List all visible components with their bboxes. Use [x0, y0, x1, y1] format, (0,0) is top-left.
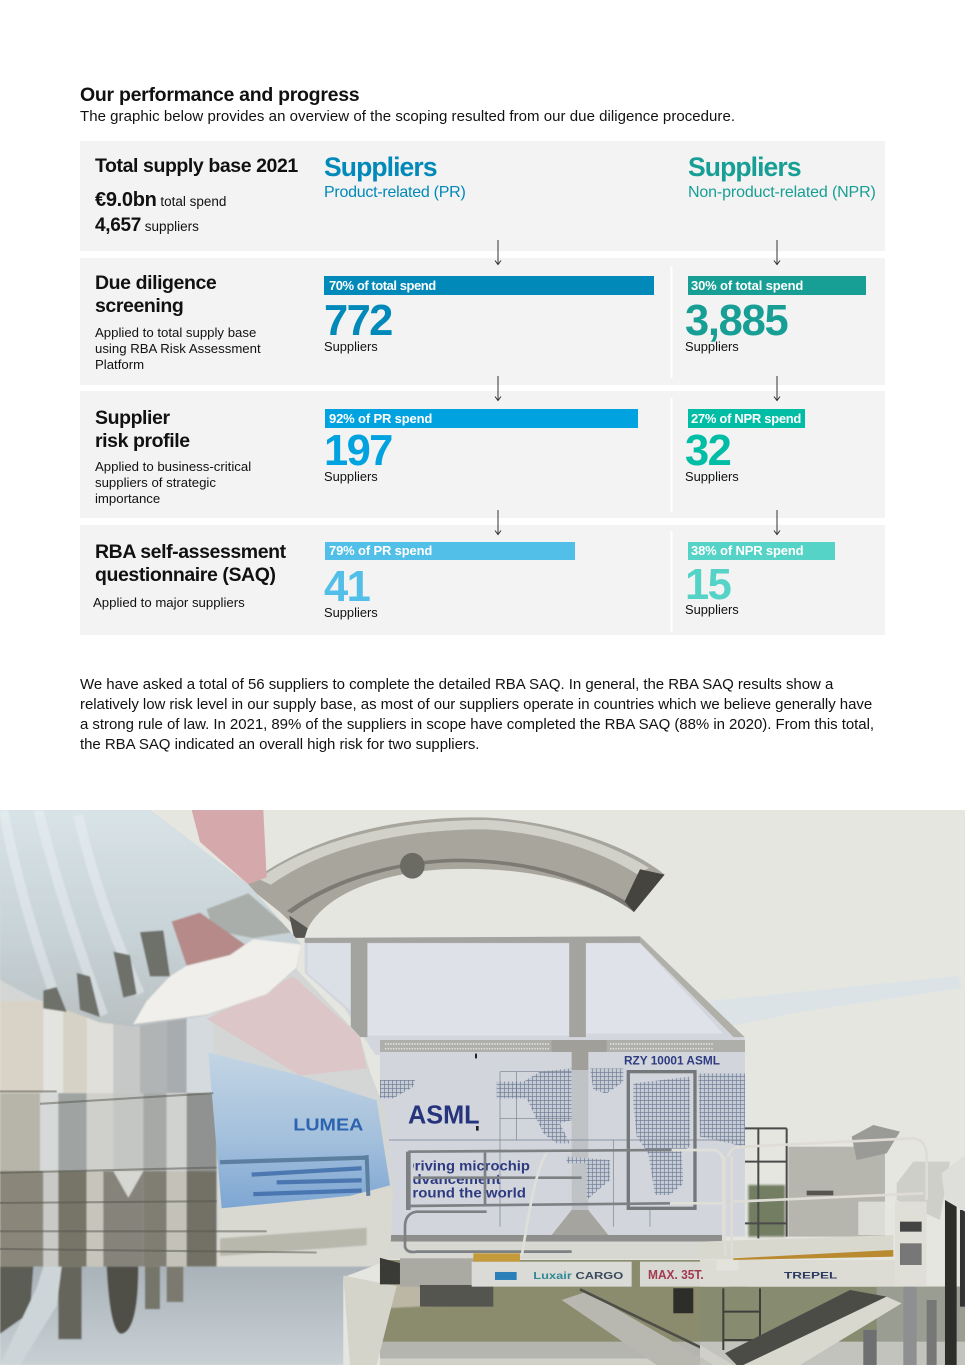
NPR suppliers label: Suppliers — [685, 469, 739, 484]
NPR spend bar 30% — [688, 276, 866, 295]
panel: due diligence screening — [80, 258, 885, 385]
arrow: NPR row 1 to 2 — [774, 240, 780, 264]
PR count 197: 197 — [324, 427, 392, 475]
PR spend bar 92% — [325, 409, 638, 428]
body paragraph: a strong rule of law. In 2021, 89% of the suppliers in scope have completed the RBA SAQ (88% in 2020). From this total, — [80, 716, 874, 733]
scissor lift deck and beam — [380, 1150, 730, 1313]
slogan: advancement — [404, 1172, 501, 1187]
cargo container upper part — [305, 936, 745, 1055]
aircraft tail wing — [708, 976, 962, 1026]
NPR count 32: 32 — [685, 427, 730, 475]
nose gear fairing — [343, 1276, 397, 1365]
due diligence heading: Due diligence — [95, 272, 216, 294]
panel: RBA self-assessment questionnaire — [80, 525, 885, 635]
world map dot pattern — [380, 1068, 745, 1200]
due diligence description: using RBA Risk Assessment — [95, 341, 261, 356]
max load lettering: MAX. 35T. — [648, 1268, 704, 1282]
risk profile description: Applied to business-critical — [95, 459, 251, 474]
body paragraph: the RBA SAQ indicated an overall high risk for two suppliers. — [80, 736, 479, 753]
due diligence description — [95, 325, 261, 372]
upper lobe with stripes — [0, 810, 302, 1027]
supplier count: 4,657 suppliers — [95, 215, 199, 236]
cargo door arch — [246, 817, 665, 938]
product-related header — [324, 152, 466, 201]
arrow: NPR row 2 to 3 — [774, 376, 780, 400]
PR spend bar 79%: 79% of PR spend — [329, 543, 432, 558]
sky — [0, 810, 965, 1365]
SAQ heading — [95, 540, 286, 586]
PR spend bar 70%: 70% of total spend — [329, 278, 436, 293]
NPR count 3,885: 3,885 — [685, 297, 787, 345]
cargo container lower panel — [380, 1040, 745, 1237]
PR spend bar 92%: 92% of PR spend — [329, 411, 432, 426]
slogan: Driving microchip — [404, 1159, 530, 1174]
NPR spend bar 27%: 27% of NPR spend — [691, 411, 801, 426]
NPR suppliers label: Suppliers — [685, 602, 739, 617]
total supply base heading: Total supply base 2021 — [95, 154, 298, 176]
panel: total supply base — [80, 141, 885, 251]
PR suppliers label: Suppliers — [324, 605, 378, 620]
PR suppliers label: Suppliers — [324, 469, 378, 484]
red tail fin — [192, 810, 267, 884]
ASML logo: ASML — [408, 1100, 480, 1130]
due diligence heading: screening — [95, 295, 183, 317]
product-related header: Suppliers — [324, 152, 437, 182]
slogan: around the world — [404, 1185, 526, 1200]
risk profile description — [95, 459, 251, 506]
body paragraph — [80, 676, 874, 753]
risk profile description: suppliers of strategic — [95, 475, 216, 490]
arrow: PR row 1 to 2 — [495, 240, 501, 264]
SAQ heading: questionnaire (SAQ) — [95, 564, 276, 586]
arrow: NPR row 3 to 4 — [774, 510, 780, 534]
due diligence heading — [95, 272, 216, 317]
panel: supplier risk profile — [80, 391, 885, 518]
NPR suppliers label: Suppliers — [685, 339, 739, 354]
risk profile description: importance — [95, 491, 160, 506]
PR count 41: 41 — [324, 563, 369, 611]
fuselage body tones — [0, 810, 400, 1365]
SAQ description: Applied to major suppliers — [93, 595, 245, 610]
PR spend bar 79% — [325, 542, 575, 560]
heading: Our performance and progress — [80, 84, 359, 106]
NPR spend bar 38%: 38% of NPR spend — [691, 543, 803, 558]
PR count 772: 772 — [324, 297, 392, 345]
non-product-related header — [688, 152, 876, 201]
NPR count 15: 15 — [685, 561, 730, 609]
band: dark horizon reflection — [0, 1171, 217, 1267]
intro text: The graphic below provides an overview of the scoping resulted from our due diligence procedure. — [80, 108, 735, 124]
risk profile heading: risk profile — [95, 430, 190, 452]
NPR spend bar 30%: 30% of total spend — [691, 278, 803, 293]
product-related header: Product-related (PR) — [324, 184, 466, 201]
due diligence description: Applied to total supply base — [95, 325, 256, 340]
PR suppliers label: Suppliers — [324, 339, 378, 354]
due diligence description: Platform — [95, 357, 144, 372]
PR spend bar 70% — [324, 276, 654, 295]
band: beige reflection — [0, 1001, 213, 1093]
arrow: PR row 2 to 3 — [495, 376, 501, 400]
SAQ heading: RBA self-assessment — [95, 540, 286, 562]
non-product-related header: Non-product-related (NPR) — [688, 184, 876, 201]
arrow: PR row 3 to 4 — [495, 510, 501, 534]
band: grey reflection — [0, 1093, 217, 1171]
total spend: €9.0bn total spend — [95, 189, 226, 211]
reflected logo: LUMEA — [293, 1114, 363, 1134]
platform equipment on right — [648, 1125, 965, 1365]
aircraft nose reflection — [0, 810, 400, 1365]
photo: ASML container being loaded onto cargo plane — [0, 810, 965, 1365]
door outline — [628, 1072, 695, 1208]
NPR spend bar 38% — [688, 542, 835, 560]
slogan — [413, 1160, 530, 1198]
risk profile heading: Supplier — [95, 407, 170, 429]
body paragraph: relatively low risk level in our supply base, as most of our suppliers operate in countries which we believe generally have — [80, 696, 872, 713]
risk profile heading — [95, 407, 190, 452]
non-product-related header: Suppliers — [688, 152, 801, 182]
ground and background (lower right) — [700, 1162, 965, 1365]
container id: RZY 10001 ASML — [624, 1053, 720, 1067]
Luxair Cargo lettering: Luxair CARGO — [533, 1271, 623, 1282]
ground and trees (lower centre) — [380, 1260, 747, 1365]
Trepel lettering: TREPEL — [784, 1270, 838, 1280]
band: lower lettering — [0, 1267, 400, 1365]
body paragraph: We have asked a total of 56 suppliers to complete the detailed RBA SAQ. In general, the RBA SAQ results show a — [80, 676, 833, 692]
